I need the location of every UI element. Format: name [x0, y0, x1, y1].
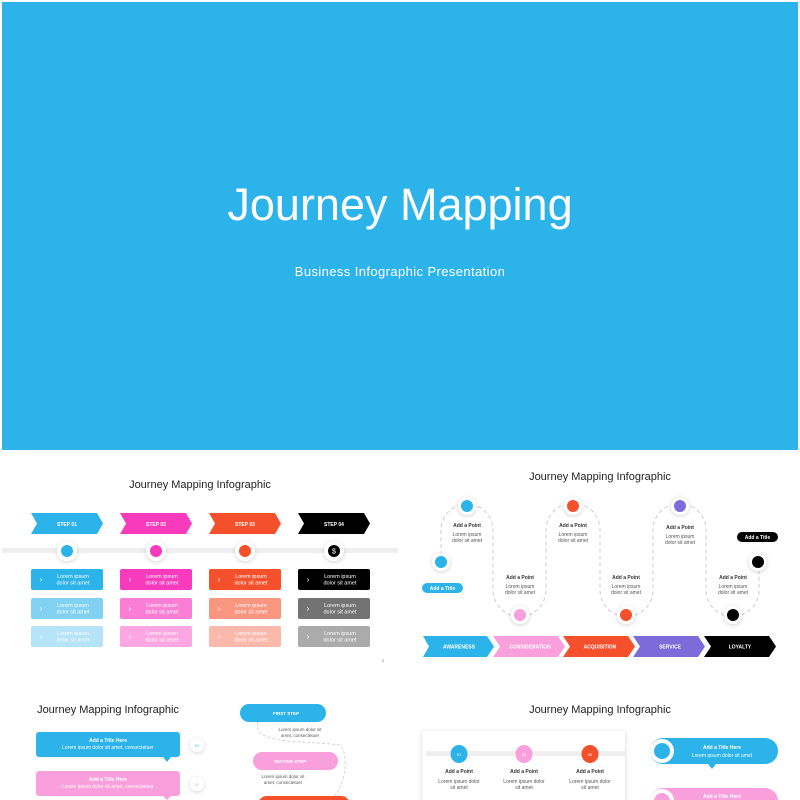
panel title: Journey Mapping Infographic	[129, 479, 271, 491]
step pills: SECOND STEP	[274, 759, 306, 764]
rows: ›	[40, 632, 43, 641]
rows: Lorem ipsum	[235, 574, 267, 580]
rows: ›	[218, 575, 221, 584]
panel: bottom right	[422, 704, 778, 800]
callout boxes: Add a Title Here	[89, 777, 127, 783]
step pills: amet, consectetuer	[264, 780, 303, 785]
panel: wave journey	[422, 471, 778, 657]
rows: dolor sit amet	[234, 610, 268, 616]
panel title: Journey Mapping Infographic	[529, 471, 671, 483]
rows: Lorem ipsum	[57, 574, 89, 580]
rows: dolor sit amet	[56, 580, 90, 586]
panel title: Journey Mapping Infographic	[529, 704, 671, 716]
callout boxes	[36, 732, 204, 800]
rows: ›	[40, 604, 43, 613]
wave nodes	[432, 497, 767, 624]
timeline card: Lorem ipsum dolor	[503, 779, 545, 785]
title pills	[650, 738, 778, 800]
rows: dolor sit amet	[56, 638, 90, 644]
timeline card: 02	[522, 752, 527, 757]
wave labels: dolor sit amet	[558, 538, 589, 544]
rows: ›	[129, 632, 132, 641]
wave labels: Add a Point	[666, 525, 694, 531]
rows: dolor sit amet	[323, 580, 357, 586]
timeline card: Lorem ipsum dolor	[438, 779, 480, 785]
step icons	[57, 541, 344, 561]
step 03: STEP 03	[235, 522, 255, 528]
wave labels: dolor sit amet	[665, 540, 696, 546]
wave labels: Lorem ipsum	[666, 534, 694, 540]
step pills: FIRST STEP	[273, 711, 299, 716]
wave labels: Add a Point	[453, 523, 481, 529]
rows: Lorem ipsum	[324, 603, 356, 609]
timeline card: Add a Point	[445, 769, 473, 775]
title pills	[422, 532, 778, 593]
wave labels: Add a Point	[559, 523, 587, 529]
timeline card: 03	[588, 752, 593, 757]
rows: dolor sit amet	[323, 610, 357, 616]
step pills: Lorem ipsum dolor sit	[278, 727, 322, 732]
rows: ›	[129, 604, 132, 613]
page number: 2	[382, 658, 385, 663]
stage arrows	[423, 636, 776, 657]
title pills: Lorem ipsum dolor sit amet	[692, 753, 753, 759]
wave labels: dolor sit amet	[718, 590, 749, 596]
wave labels: Lorem ipsum	[612, 584, 640, 590]
wave labels: Add a Point	[612, 575, 640, 581]
rows: Lorem ipsum	[146, 631, 178, 637]
step 03	[209, 513, 281, 534]
stage arrows: SERVICE	[659, 644, 682, 650]
wave labels: dolor sit amet	[452, 538, 483, 544]
rows: dolor sit amet	[145, 580, 179, 586]
rows: ›	[218, 604, 221, 613]
timeline card: Add a Point	[576, 769, 604, 775]
timeline card: Add a Point	[510, 769, 538, 775]
rows: ›	[307, 575, 310, 584]
wave labels: dolor sit amet	[611, 590, 642, 596]
wave labels: dolor sit amet	[505, 590, 536, 596]
wave labels: Add a Point	[719, 575, 747, 581]
title pills: Add a Title	[430, 586, 455, 592]
rows: Lorem ipsum	[235, 631, 267, 637]
wave labels: Lorem ipsum	[719, 584, 747, 590]
rows	[31, 569, 370, 647]
callout boxes: Lorem ipsum dolor sit amet, consectetuer	[62, 745, 154, 751]
stage arrows: LOYALTY	[729, 644, 752, 650]
rows: dolor sit amet	[234, 580, 268, 586]
rows: Lorem ipsum	[324, 574, 356, 580]
stage arrows: CONSIDERATION	[509, 644, 551, 650]
rows: Lorem ipsum	[57, 603, 89, 609]
timeline card: sit amet	[581, 785, 599, 791]
timeline card	[422, 731, 625, 800]
rows: ›	[307, 632, 310, 641]
title: Journey Mapping	[227, 179, 573, 230]
callout boxes: 02	[195, 782, 200, 787]
timeline card: sit amet	[450, 785, 468, 791]
panel: bottom left	[36, 704, 350, 800]
step pills: amet, consectetuer	[281, 733, 320, 738]
rows: ›	[129, 575, 132, 584]
rows: ›	[40, 575, 43, 584]
rows: Lorem ipsum	[324, 631, 356, 637]
timeline card: Lorem ipsum dolor	[569, 779, 611, 785]
title pills: Add a Title Here	[703, 794, 741, 800]
step 04: STEP 04	[324, 522, 344, 528]
wave labels: Lorem ipsum	[453, 532, 481, 538]
timeline card: sit amet	[515, 785, 533, 791]
rows: dolor sit amet	[145, 638, 179, 644]
hero banner	[2, 2, 798, 450]
callout boxes: 01	[195, 743, 200, 748]
rows: Lorem ipsum	[146, 574, 178, 580]
rows: dolor sit amet	[323, 638, 357, 644]
wave labels: Add a Point	[506, 575, 534, 581]
step 04	[298, 513, 370, 534]
step 02	[120, 513, 192, 534]
rows: dolor sit amet	[234, 638, 268, 644]
title pills: Add a Title	[745, 535, 770, 541]
wave labels: Lorem ipsum	[559, 532, 587, 538]
step icons: $	[332, 548, 336, 556]
callout boxes: Add a Title Here	[89, 738, 127, 744]
dashed wave	[441, 503, 759, 616]
callout boxes: Lorem ipsum dolor sit amet, consectetuer	[62, 784, 154, 790]
wave labels: Lorem ipsum	[506, 584, 534, 590]
rows: dolor sit amet	[56, 610, 90, 616]
step 02: STEP 02	[146, 522, 166, 528]
rows: Lorem ipsum	[235, 603, 267, 609]
rows: ›	[218, 632, 221, 641]
subtitle: Business Infographic Presentation	[295, 264, 505, 279]
step pills: Lorem ipsum dolor sit	[261, 774, 305, 779]
timeline card: 01	[457, 752, 462, 757]
panel: steps	[2, 479, 398, 663]
wave labels	[452, 523, 749, 596]
rows: dolor sit amet	[145, 610, 179, 616]
stage arrows: AWARENESS	[443, 644, 476, 650]
rows: ›	[307, 604, 310, 613]
title pills: Add a Title Here	[703, 745, 741, 751]
stage arrows: ACQUISITION	[584, 644, 617, 650]
step 01: STEP 01	[57, 522, 77, 528]
rows: Lorem ipsum	[146, 603, 178, 609]
rows: Lorem ipsum	[57, 631, 89, 637]
step 01	[31, 513, 103, 534]
step pills	[240, 704, 350, 800]
panel title: Journey Mapping Infographic	[37, 704, 179, 716]
